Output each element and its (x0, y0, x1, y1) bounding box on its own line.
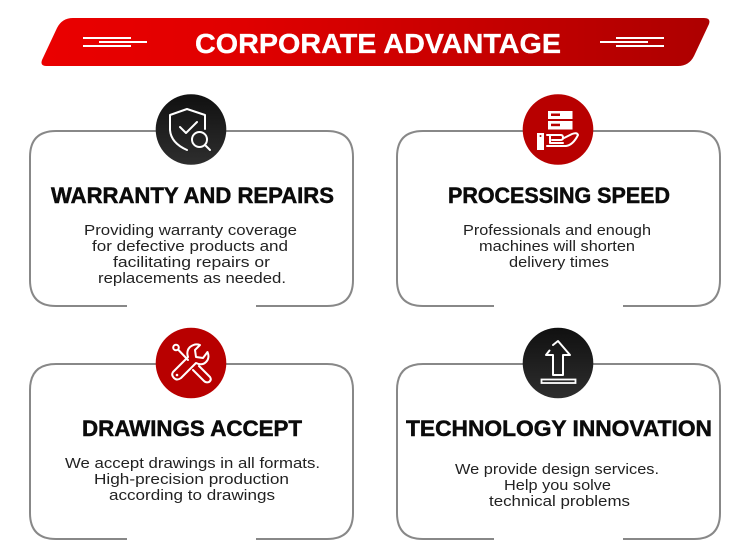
heading: WARRANTY AND REPAIRS (51, 183, 334, 208)
heading: PROCESSING SPEED (448, 183, 670, 208)
body text (65, 455, 320, 504)
heading: DRAWINGS ACCEPT (82, 416, 303, 441)
body text (455, 461, 659, 510)
body text: We accept drawings in all formats. (65, 455, 320, 472)
body text: delivery times (509, 254, 609, 271)
panel: warranty and repairs (30, 94, 353, 306)
body text (463, 222, 651, 271)
icon: upward arrow on base (523, 328, 593, 398)
title: CORPORATE ADVANTAGE (195, 28, 561, 59)
body text: facilitating repairs or (113, 254, 270, 271)
body text: Providing warranty coverage (84, 222, 297, 239)
panel outline (397, 364, 720, 539)
body text: technical problems (489, 493, 630, 510)
body text: We provide design services. (455, 461, 659, 478)
decorative lines right (600, 37, 664, 47)
body text: according to drawings (109, 487, 275, 504)
icon: crossed wrench and screwdriver (156, 328, 226, 398)
panel: processing speed (397, 94, 720, 306)
body text: machines will shorten (479, 238, 635, 255)
body text: replacements as needed. (98, 270, 286, 287)
panel outline (30, 364, 353, 539)
heading: TECHNOLOGY INNOVATION (406, 416, 712, 441)
body text: for defective products and (92, 238, 288, 255)
body text: Help you solve (504, 477, 611, 494)
body text: High-precision production (94, 471, 289, 488)
body text: Professionals and enough (463, 222, 651, 239)
panel: drawings accept (30, 328, 353, 539)
icon: shield with magnifier (156, 94, 226, 165)
decorative lines left (83, 37, 147, 47)
body text (84, 222, 297, 287)
banner: corporate advantage (42, 18, 709, 66)
panel outline (397, 131, 720, 306)
icon: hand with stacked boxes (523, 94, 593, 165)
panel: technology innovation (397, 328, 720, 539)
panel outline (30, 131, 353, 306)
